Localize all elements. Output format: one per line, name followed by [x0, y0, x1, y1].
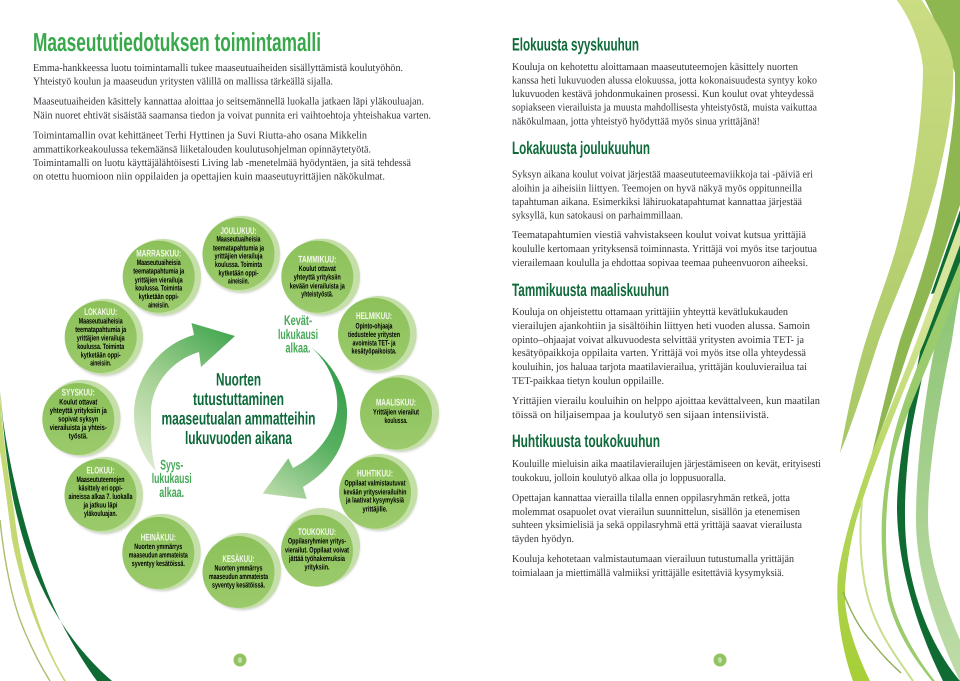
text block: april to may: suhteen yksimielisiä ja sekä oppilasryhmä että yrittäjä saavat vierailusta [512, 520, 802, 531]
intro text block: ammattikorkeakoulussa tekemäänsä liiketalouden koulutusohjelman opinnäytetyötä. [33, 144, 371, 156]
month circle: lokakuu: aineisiin. [90, 359, 111, 368]
month circle: marraskuu: aineisiin. [148, 300, 169, 309]
month circle: marraskuu: MARRASKUU: [136, 249, 181, 260]
month circle: huhtikuu: HUHTIKUU: [357, 469, 393, 480]
text block: january to march [512, 307, 821, 421]
month circle: marraskuu: Maaseutuaiheisia [137, 258, 181, 267]
text block: august to september: lukuvuoden kestävä johdonmukainen prosessi. Kun koulut ovat yhteydessä [512, 89, 814, 100]
month circle: helmikuu: HELMIKUU: [356, 311, 392, 322]
intro text block: Näin nuoret ehtivät sisäistää saamansa tiedon ja voivat punnita eri vaihtoehtoja yhteishakua varten. [33, 111, 431, 122]
month circle: tammikuu: kevään vierailuista ja [290, 281, 345, 290]
cycle centre title: maaseutualan ammatteihin [162, 409, 316, 429]
page number 9: 9 [718, 658, 722, 664]
month circle: lokakuu [65, 299, 143, 375]
month circle: toukokuu [281, 508, 360, 587]
label: spring term starts: lukukausi [278, 326, 318, 342]
text block: april to may: Opettajan kannattaa vierailla tilalla ennen oppilasryhmän retkeä, jotta [512, 493, 790, 504]
text block: october to december: tapahtuman aikana. Esimerkiksi lähiruokatapahtumat kannattaa järjestää [512, 197, 802, 208]
month circle: syyskuu: työstä. [69, 431, 88, 440]
heading: Lokakuusta joulukuuhun: Lokakuusta joulukuuhun [512, 138, 650, 158]
month circle: helmikuu [338, 296, 417, 372]
text block: january to march: vierailujen ajankohtiin ja sisältöihin liittyen heti vuoden alussa. Samoin [512, 321, 811, 332]
month circle: syyskuu [42, 380, 120, 456]
month circle: kesäkuu: maaseudun ammateista [209, 572, 268, 581]
cycle centre title: tutustuttaminen [193, 389, 284, 409]
month circle: elokuu: aineissa alkaa 7. luokalla [68, 492, 133, 501]
month circle: heinäkuu: syventyy kesätöissä. [132, 559, 185, 568]
month circle: heinäkuu [122, 514, 201, 590]
month circle: lokakuu: teematapahtumia ja [75, 325, 127, 334]
month circle: marraskuu: teematapahtumia ja [133, 267, 185, 276]
month circle: maaliskuu: koulussa. [384, 416, 408, 425]
text block: october to december: aloihin ja aiheisiin liittyen. Teemojen on hyvä näkyä myös oppitunneilla [512, 183, 802, 194]
page number 8 [234, 654, 246, 666]
decoration: right page swooshes [837, 0, 960, 681]
cycle centre title: Nuorten [216, 369, 261, 389]
month circle: joulukuu: aineisiin. [228, 276, 249, 286]
month circle: syyskuu: sopivat syksyn [58, 414, 98, 423]
arrow: spring term arc [263, 347, 347, 499]
month circle: heinäkuu: Nuorten ymmärrys [134, 542, 183, 551]
month circle: elokuu: Maaseututeemojen [76, 475, 125, 484]
month circle: lokakuu: Maaseutuaiheisia [79, 316, 123, 325]
month circle: tammikuu: yhteyttä yrityksiin [294, 273, 341, 282]
month circle: heinäkuu: maaseudun ammateista [129, 551, 188, 560]
text block: january to march: Kouluja on ohjeistettu ottamaan yrittäjiin yhteyttä kevätlukukauden [512, 307, 789, 318]
heading: Tammikuusta maaliskuuhun: Tammikuusta maaliskuuhun [512, 280, 669, 300]
cycle centre title: lukuvuoden aikana [185, 428, 293, 448]
page number 8: 8 [238, 658, 242, 664]
month circle: joulukuu: yrittäjien vierailuja [214, 252, 263, 261]
text block: january to march: opinto–ohjaajat voivat alkuvuodesta selvittää yritysten avoimia TET- ja [512, 335, 804, 346]
month circle: toukokuu: TOUKOKUU: [298, 527, 336, 538]
month circle: maaliskuu: MAALISKUU: [376, 398, 416, 409]
label: autumn term starts: alkaa. [159, 484, 184, 500]
label: spring term starts [278, 312, 318, 356]
label: autumn term starts [152, 456, 192, 500]
month circle: lokakuu: LOKAKUU: [84, 307, 117, 318]
left page text panel [33, 27, 431, 182]
text block: august to september: näkökulmaan, jotta yhteistyö hyödyttää myös sinua yrittäjänä! [512, 116, 760, 127]
label: autumn term starts: Syys- [160, 456, 183, 472]
text block: april to may: Kouluille mieluisin aika maatilavierailujen järjestämiseen on kevät, erityisesti [512, 459, 821, 470]
month circle: joulukuu [202, 216, 280, 292]
month circle: huhtikuu: yrittäjille. [362, 505, 388, 514]
month circle: helmikuu: avoimista TET- ja [352, 339, 396, 348]
month circle: syyskuu: vierailuista ja yhteis- [50, 423, 107, 432]
month circle: toukokuu: vierailut. Oppilaat voivat [285, 545, 349, 554]
month circle: kesäkuu [202, 533, 281, 609]
text block: april to may [512, 459, 821, 579]
label: spring term starts: Kevät- [284, 312, 312, 328]
text block: october to december: Teematapahtumien viestiä vahvistakseen koulut voivat kutsua yrittäjiä [512, 230, 806, 241]
text block: april to may: toimialaan ja miettimällä valmiiksi yrittäjälle esitettäviä kysymyksiä. [512, 568, 784, 579]
title: Maaseututiedotuksen toimintamalli [33, 27, 321, 57]
month circle: tammikuu [281, 239, 360, 315]
page number 9 [714, 654, 726, 666]
month circle: tammikuu: Koulut ottavat [299, 264, 336, 273]
intro text block [33, 63, 431, 182]
label: spring term starts: alkaa. [286, 340, 310, 356]
month circle: marraskuu: yrittäjien vierailuja [135, 275, 183, 284]
month circle: tammikuu: TAMMIKUU: [298, 254, 336, 265]
month circle: kesäkuu: syventyy kesätöissä. [212, 581, 265, 590]
month circle: huhtikuu: kevään yritysvierailuihin [344, 487, 407, 496]
text block: october to december: Syksyn aikana koulut voivat järjestää maaseututeemaviikkoja tai -päiviä eri [512, 170, 813, 181]
month circle: huhtikuu: ja laativat kysymyksiä [345, 496, 404, 505]
month circle: helmikuu: tiedustelee yritysten [348, 330, 400, 339]
text block: august to september: Kouluja on kehotettu aloittamaan maaseututeemojen käsittely nuorten [512, 62, 799, 73]
text block: january to march: kesätyöpaikkoja oppilaita varten. Yrittäjä voi myös itse olla yhteydessä [512, 348, 806, 359]
heading: Huhtikuusta toukokuuhun: Huhtikuusta toukokuuhun [512, 431, 660, 451]
month circle: syyskuu: yhteyttä yrityksiin ja [50, 406, 107, 415]
intro text block: Yhteistyö koulun ja maaseudun yritysten välillä on mallissa tärkeällä sijalla. [33, 76, 333, 88]
month circle: syyskuu: Koulut ottavat [59, 397, 98, 406]
month circle: elokuu: ELOKUU: [86, 465, 114, 476]
text block: october to december: syksyllä, kun satokausi on parhaimmillaan. [512, 210, 683, 221]
month circle: huhtikuu [339, 454, 418, 530]
month circle: helmikuu: Opinto-ohjaaja [356, 321, 393, 330]
month circle: tammikuu: yhteistyöstä. [301, 290, 333, 299]
month circle: marraskuu: kytketään oppi- [139, 292, 179, 301]
text block: april to may: toukokuu, jolloin koulutyö alkaa olla jo loppusuoralla. [512, 473, 726, 484]
decoration: left page swooshes [0, 390, 112, 681]
month circle: elokuu: yläkouluajan. [84, 509, 117, 518]
month circle: elokuu: ja jatkuu läpi [83, 500, 118, 510]
intro text block: on otettu huomioon niin oppilaiden ja opettajien kuin maaseutuyrittäjien näkökulmat. [33, 172, 385, 182]
heading: Elokuusta syyskuuhun: Elokuusta syyskuuhun [512, 35, 639, 55]
text block: april to may: molemmat osapuolet ovat vierailun suunnittelun, sisällön ja etenemisen [512, 507, 801, 518]
month circle: kesäkuu: KESÄKUU: [222, 553, 254, 565]
month circle: helmikuu: kesätyöpaikoista. [352, 347, 396, 356]
text block: january to march: töissä on hiljaisempaa ja koulutyö sen sijaan intensiivistä. [512, 410, 769, 421]
month circle: maaliskuu: Yrittäjien vierailut [373, 407, 419, 416]
intro text block: Maaseutuaiheiden käsittely kannattaa aloittaa jo seitsemännellä luokalla jatkaen läpi yläkouluajan. [33, 97, 424, 108]
month circle: lokakuu: koulussa. Toiminta [77, 342, 125, 351]
intro text block: Toimintamalli on luotu käyttäjälähtöisesti Living lab -menetelmää hyödyntäen, ja sitä tehdessä [33, 158, 411, 169]
month circle: joulukuu: kytketään oppi- [218, 268, 259, 277]
arrow: autumn term arc [134, 323, 235, 471]
month circle: toukokuu: Oppilasryhmien yritys- [288, 537, 346, 546]
month circle: joulukuu: teematapahtumia ja [213, 243, 264, 252]
text block: august to september [512, 62, 817, 127]
month circle: lokakuu: kytketään oppi- [81, 350, 121, 359]
month circle: marraskuu [123, 239, 201, 315]
month circle: joulukuu: Maaseutuaiheisia [216, 235, 261, 244]
month circle: huhtikuu: Oppilaat valmistautuvat [344, 479, 406, 488]
month circle: kesäkuu: Nuorten ymmärrys [214, 564, 263, 573]
label: autumn term starts: lukukausi [152, 470, 192, 486]
intro text block: Emma-hankkeessa luotu toimintamalli tukee maaseutuaiheiden sisällyttämistä koulutyöhön. [33, 63, 403, 74]
month circle: heinäkuu: HEINÄKUU: [141, 532, 176, 544]
month circle: elokuu [64, 457, 143, 533]
text block: august to september: sopiakseen vierailuista ja muusta mahdollisesta yhteistyöstä, muista vaikuttaa [512, 103, 817, 114]
text block: october to december: koululle kertomaan yrityksensä toiminnasta. Yrittäjä voi myös itse tarjoutua [512, 244, 817, 255]
text block: january to march: kouluihin, jos haluaa tarjota maatilavierailua, yrittäjän kouluvierailua tai [512, 362, 807, 373]
month circle: toukokuu: yrityksiin. [304, 562, 330, 571]
intro text block: Toimintamallin ovat kehittäneet Terhi Hyttinen ja Suvi Riutta-aho osana Mikkelin [33, 131, 368, 142]
month circle: maaliskuu [360, 375, 439, 451]
month circle: joulukuu: koulussa. Toiminta [215, 260, 262, 269]
right page text panel [512, 35, 821, 579]
month circle: marraskuu: koulussa. Toiminta [135, 283, 183, 292]
text block: april to may: täyden hyödyn. [512, 534, 574, 545]
month circle: elokuu: käsittely eri oppi- [78, 484, 123, 492]
text block: april to may: Kouluja kehotetaan valmistautumaan vierailuun tutustumalla yrittäjän [512, 554, 795, 565]
cycle centre title [162, 369, 316, 448]
text block: october to december: vierailemaan koululla ja ehdottaa sopivaa teemaa puheenvuoron aiheeksi. [512, 258, 808, 269]
text block: august to september: kanssa heti lukuvuoden alussa elokuussa, jotta kokonaisuudesta syntyy koko [512, 76, 817, 87]
text block: october to december [512, 170, 817, 269]
month circle: lokakuu: yrittäjien vierailuja [77, 334, 125, 342]
text block: january to march: TET-paikkaa tietyn koulun oppilaille. [512, 376, 664, 387]
month circle: toukokuu: jättää työhakemuksia [288, 554, 345, 563]
month circle: syyskuu: SYYSKUU: [62, 388, 95, 399]
text block: january to march: Yrittäjien vierailu kouluihin on helppo ajoittaa kevättalveen, kun maatilan [512, 396, 821, 407]
month circle: joulukuu: JOULUKUU: [220, 226, 256, 237]
